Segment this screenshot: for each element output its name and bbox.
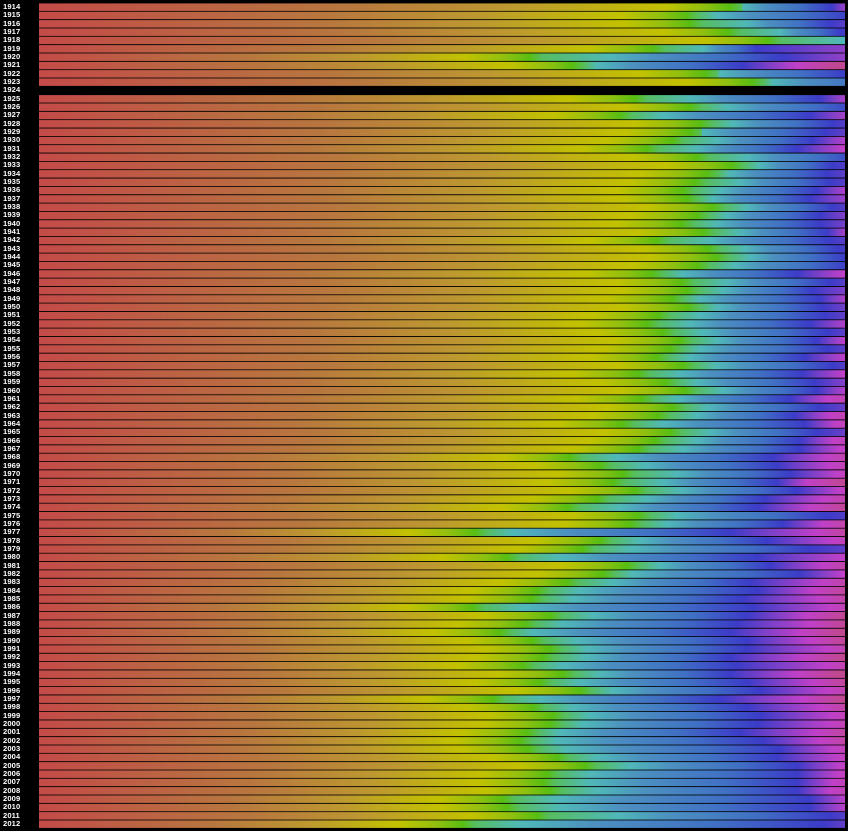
year labels column: 1926 <box>3 102 20 111</box>
bar 1941 <box>39 228 845 236</box>
bar 1996 <box>39 687 845 695</box>
year labels column: 1918 <box>3 35 20 44</box>
year labels column: 1925 <box>3 94 20 103</box>
year labels column: 1991 <box>3 644 20 653</box>
year labels column: 1990 <box>3 636 20 645</box>
bar 1969 <box>39 462 845 469</box>
year labels column: 1930 <box>3 135 20 144</box>
year labels column: 1965 <box>3 427 20 436</box>
year labels column: 1935 <box>3 177 20 186</box>
year labels column: 1915 <box>3 10 20 19</box>
year labels column: 1975 <box>3 511 20 520</box>
year labels column: 1944 <box>3 252 20 261</box>
bar 1930 <box>39 137 845 144</box>
year labels column: 2001 <box>3 727 20 736</box>
year labels column: 1993 <box>3 661 20 670</box>
bar 1937 <box>39 195 845 203</box>
bar 1953 <box>39 329 845 336</box>
year labels column: 1958 <box>3 369 20 378</box>
year labels column: 1974 <box>3 502 20 511</box>
bar 1963 <box>39 412 845 419</box>
year labels column: 1920 <box>3 52 20 61</box>
year labels column: 1978 <box>3 536 20 545</box>
bar 1959 <box>39 379 845 386</box>
bar 1957 <box>39 362 845 369</box>
year labels column: 1927 <box>3 110 20 119</box>
bar 1994 <box>39 670 845 678</box>
year labels column: 1919 <box>3 44 20 53</box>
year labels column: 1954 <box>3 335 20 344</box>
bar 1970 <box>39 470 845 478</box>
bar 1929 <box>39 128 845 136</box>
year labels column: 1943 <box>3 244 20 253</box>
year labels column: 2000 <box>3 719 20 728</box>
year labels column: 1923 <box>3 77 20 86</box>
bar 1944 <box>39 254 845 261</box>
bar 1999 <box>39 712 845 720</box>
year labels column: 1982 <box>3 569 20 578</box>
year labels column: 1996 <box>3 686 20 695</box>
bar 1960 <box>39 387 845 394</box>
bar 1952 <box>39 320 845 328</box>
year labels column: 2012 <box>3 819 20 828</box>
year labels column: 2002 <box>3 736 20 745</box>
year labels column: 1924 <box>3 85 20 94</box>
bar 1917 <box>39 28 845 36</box>
bar 1991 <box>39 645 845 653</box>
bar 1992 <box>39 654 845 661</box>
year labels column: 1989 <box>3 627 20 636</box>
bar 1981 <box>39 562 845 569</box>
bar 1956 <box>39 354 845 361</box>
year labels column: 2003 <box>3 744 20 753</box>
year labels column: 1942 <box>3 235 20 244</box>
bar 1964 <box>39 420 845 428</box>
year labels column: 1971 <box>3 477 20 486</box>
bar 1985 <box>39 595 845 603</box>
bar 1949 <box>39 295 845 303</box>
bar 2004 <box>39 754 845 761</box>
year labels column: 2007 <box>3 777 20 786</box>
year labels column: 1938 <box>3 202 20 211</box>
year labels column: 1936 <box>3 185 20 194</box>
year labels column: 1914 <box>3 2 20 11</box>
year labels column: 1969 <box>3 461 20 470</box>
bar 1954 <box>39 337 845 344</box>
year labels column: 1941 <box>3 227 20 236</box>
bar 2007 <box>39 779 845 786</box>
year labels column: 1962 <box>3 402 20 411</box>
bar 2005 <box>39 762 845 770</box>
year labels column: 1950 <box>3 302 20 311</box>
year labels column: 1987 <box>3 611 20 620</box>
bar 1984 <box>39 587 845 594</box>
year labels column: 1976 <box>3 519 20 528</box>
year labels column: 1963 <box>3 410 20 420</box>
bar 1936 <box>39 187 845 194</box>
year labels column: 1940 <box>3 219 20 228</box>
bar 1982 <box>39 570 845 578</box>
year labels column: 2009 <box>3 794 20 803</box>
bar 1927 <box>39 112 845 119</box>
bar 1938 <box>39 203 845 211</box>
year labels column: 1955 <box>3 344 20 353</box>
bar 2000 <box>39 720 845 728</box>
year labels column: 1933 <box>3 160 20 169</box>
bar 1935 <box>39 178 845 186</box>
year labels column: 1986 <box>3 602 20 611</box>
bar 1962 <box>39 404 845 411</box>
year labels column: 1981 <box>3 561 20 570</box>
year labels column: 1977 <box>3 527 20 536</box>
bar 1950 <box>39 304 845 311</box>
bar 1951 <box>39 312 845 319</box>
bar 1926 <box>39 103 845 111</box>
year labels column: 1999 <box>3 711 20 720</box>
year labels column: 1968 <box>3 452 20 461</box>
bar 2002 <box>39 737 845 745</box>
bar 1995 <box>39 679 845 686</box>
bar 1966 <box>39 437 845 444</box>
bar 1955 <box>39 345 845 353</box>
year labels column: 2006 <box>3 769 20 778</box>
bar 1974 <box>39 504 845 511</box>
year labels column: 1961 <box>3 394 20 403</box>
bar 1977 <box>39 529 845 536</box>
bar 1916 <box>39 20 845 28</box>
year labels column: 1953 <box>3 327 20 336</box>
year labels column: 1956 <box>3 352 20 361</box>
year labels column <box>3 2 20 828</box>
year labels column: 1921 <box>3 60 20 69</box>
year labels column: 1988 <box>3 619 20 628</box>
bar 1958 <box>39 370 845 378</box>
year labels column: 1948 <box>3 285 20 294</box>
bar 1987 <box>39 612 845 620</box>
year labels column: 2011 <box>3 811 20 820</box>
bar 1971 <box>39 479 845 486</box>
year labels column: 1972 <box>3 486 20 495</box>
bar 1934 <box>39 170 845 178</box>
bar 2010 <box>39 804 845 811</box>
year labels column: 1929 <box>3 127 20 136</box>
bar 1986 <box>39 604 845 611</box>
bar 1968 <box>39 454 845 461</box>
year labels column: 1928 <box>3 119 20 128</box>
year labels column: 1985 <box>3 594 20 603</box>
year labels column: 1983 <box>3 577 20 586</box>
bar 1965 <box>39 429 845 436</box>
bar 1946 <box>39 270 845 278</box>
year labels column: 1922 <box>3 69 20 78</box>
year labels column: 1980 <box>3 552 20 561</box>
bar 1976 <box>39 520 845 528</box>
year labels column: 1967 <box>3 444 20 453</box>
bar 2003 <box>39 745 845 753</box>
bar 1928 <box>39 120 845 128</box>
year labels column: 1959 <box>3 377 20 386</box>
year labels column: 1949 <box>3 294 20 303</box>
bar 1918 <box>39 37 845 44</box>
bar 1940 <box>39 220 845 228</box>
year labels column: 2008 <box>3 786 20 795</box>
bar 2012 <box>39 820 845 828</box>
year labels column: 1973 <box>3 494 20 503</box>
bar 1931 <box>39 145 845 153</box>
year labels column: 1979 <box>3 544 20 553</box>
year labels column: 1984 <box>3 586 20 595</box>
year labels column: 1966 <box>3 436 20 445</box>
bar 1989 <box>39 629 845 636</box>
bar 2001 <box>39 729 845 736</box>
bar 1997 <box>39 695 845 703</box>
bar 1979 <box>39 545 845 553</box>
year labels column: 1917 <box>3 27 20 36</box>
bar 1967 <box>39 445 845 453</box>
bar 1939 <box>39 212 845 219</box>
bar 1972 <box>39 487 845 494</box>
year labels column: 1995 <box>3 677 20 686</box>
year labels column: 1937 <box>3 194 20 203</box>
bar 1948 <box>39 287 845 294</box>
bar 1920 <box>39 53 845 61</box>
year labels column: 1952 <box>3 319 20 328</box>
bar 1943 <box>39 245 845 253</box>
bar 1922 <box>39 70 845 78</box>
year labels column: 1931 <box>3 144 20 153</box>
bar 1915 <box>39 12 845 19</box>
year labels column: 1970 <box>3 469 20 478</box>
bar 1973 <box>39 495 845 503</box>
year labels column: 1934 <box>3 169 20 178</box>
bar 1990 <box>39 637 845 645</box>
bar 1942 <box>39 237 845 244</box>
bar 1975 <box>39 512 845 519</box>
bar 1980 <box>39 554 845 561</box>
year labels column: 1957 <box>3 360 20 369</box>
bar 2009 <box>39 795 845 803</box>
year labels column: 1946 <box>3 269 20 278</box>
year labels column: 1994 <box>3 669 20 678</box>
year labels column: 1992 <box>3 652 20 661</box>
year labels column: 1960 <box>3 386 20 394</box>
year labels column: 2004 <box>3 752 20 761</box>
year labels column: 1939 <box>3 210 20 219</box>
bar 1925 <box>39 95 845 103</box>
bar 1947 <box>39 279 845 286</box>
bar 2006 <box>39 770 845 778</box>
bar 1932 <box>39 153 845 161</box>
year labels column: 1951 <box>3 310 20 319</box>
bar 2008 <box>39 787 845 795</box>
bar 2011 <box>39 812 845 820</box>
year labels column: 1947 <box>3 277 20 286</box>
year labels column: 1964 <box>3 419 20 428</box>
bar 1978 <box>39 537 845 544</box>
bar 1998 <box>39 704 845 711</box>
year labels column: 1945 <box>3 260 20 269</box>
year labels column: 2005 <box>3 761 20 770</box>
bar 1983 <box>39 579 845 586</box>
year labels column: 1997 <box>3 694 20 703</box>
bar 1961 <box>39 395 845 403</box>
bar 1919 <box>39 45 845 53</box>
bar 1988 <box>39 620 845 628</box>
year labels column: 1916 <box>3 19 20 28</box>
bar 1933 <box>39 162 845 169</box>
bar 1923 <box>39 78 845 86</box>
year labels column: 2010 <box>3 802 20 811</box>
year labels column: 1932 <box>3 152 20 161</box>
year labels column: 1998 <box>3 702 20 711</box>
bar 1921 <box>39 62 845 69</box>
bar 1945 <box>39 262 845 269</box>
bar 1993 <box>39 662 845 670</box>
bar 1914 <box>39 3 845 11</box>
